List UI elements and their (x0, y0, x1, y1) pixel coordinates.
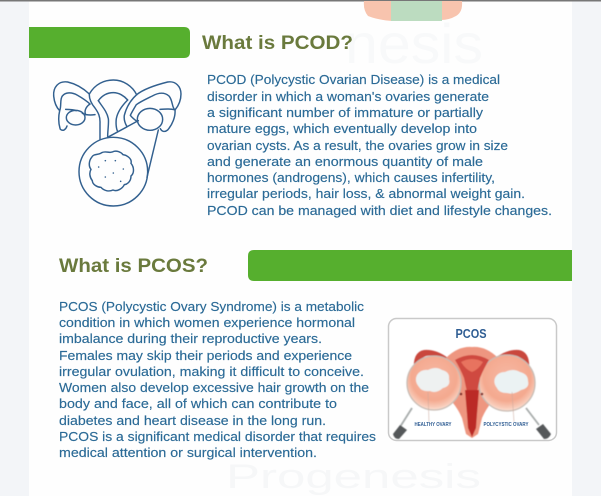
label: polycystic ovary: POLYCYSTIC OVARY (484, 422, 529, 428)
text block: PCOS description: condition in which women experience hormonal (59, 315, 355, 330)
illustration: uterus and magnified ovaries (393, 347, 551, 439)
text block: PCOS description: medical attention or surgical intervention. (59, 445, 317, 460)
diagram title: PCOS (456, 327, 486, 341)
panel: PCOS diagram (388, 318, 556, 440)
text block: PCOS description: imbalance during their reproductive years. (59, 331, 322, 346)
text block: PCOS description: PCOS (Polycystic Ovary Syndrome) is a metabolic (59, 299, 365, 314)
green banner: PCOD (29, 27, 190, 58)
icon: uterus with ovarian cyst (54, 80, 181, 206)
text block: PCOD description: hormones (androgens), which causes infertility, (207, 170, 495, 185)
label: healthy ovary: HEALTHY OVARY (414, 422, 452, 428)
text block: PCOS description: irregular ovulation, making it difficult to conceive. (59, 364, 364, 379)
text block: PCOD description: mature eggs, which eventually develop into (207, 121, 477, 136)
text block: PCOS description: Women also develop excessive hair growth on the (59, 380, 369, 395)
text block: PCOS description: body and face, all of which can contribute to (59, 396, 337, 411)
watermark bottom: Progenesis (226, 458, 481, 496)
text block: PCOS description (59, 299, 377, 460)
text block: PCOD description: PCOD (Polycystic Ovarian Disease) is a medical (207, 72, 500, 87)
text block: PCOS description: Females may skip their periods and experience (59, 348, 352, 363)
diagram card (388, 318, 556, 440)
heading: What is PCOD?: What is PCOD? (202, 32, 353, 54)
top figure fragment (364, 1, 462, 21)
text block: PCOS description: diabetes and heart disease in the long run. (59, 413, 326, 428)
text block: PCOD description: ovarian cysts. As a result, the ovaries grow in size (207, 138, 508, 153)
text block: PCOD description: and generate an enormous quantity of male (207, 154, 483, 169)
text block: PCOD description (207, 72, 552, 218)
text block: PCOD description: irregular periods, hair loss, & abnormal weight gain. (207, 186, 525, 201)
text block: PCOD description: a significant number of immature or partially (207, 105, 484, 120)
green banner: PCOS (248, 250, 572, 281)
watermark top: nesis (345, 12, 483, 75)
text block: PCOD description: disorder in which a woman's ovaries generate (207, 89, 489, 104)
text block: PCOD description: PCOD can be managed with diet and lifestyle changes. (207, 203, 552, 218)
heading: What is PCOS?: What is PCOS? (59, 255, 208, 277)
text block: PCOS description: PCOS is a significant medical disorder that requires (59, 429, 377, 444)
